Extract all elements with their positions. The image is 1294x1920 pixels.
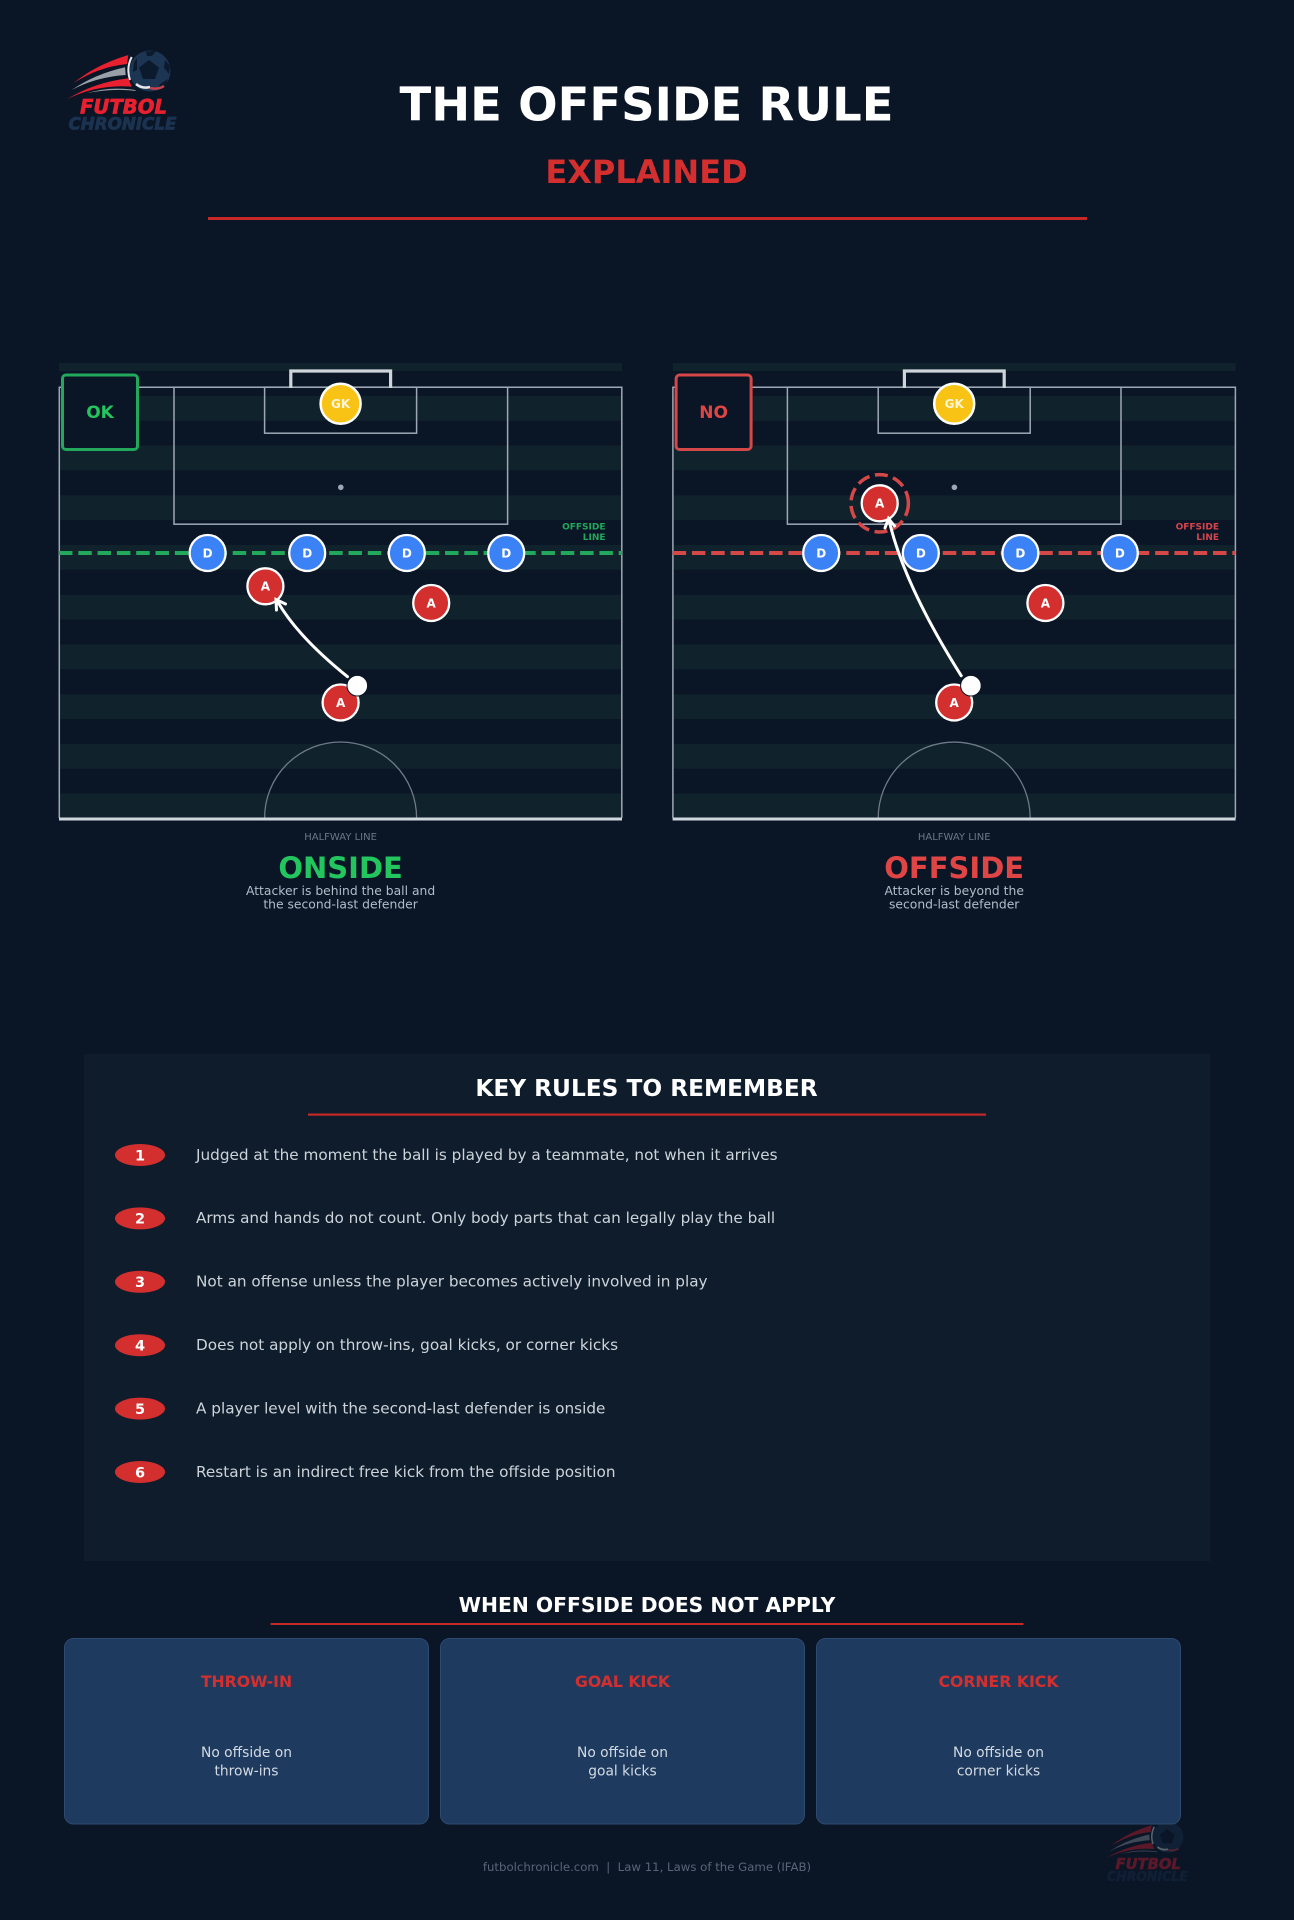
OK badge: OK <box>86 403 115 423</box>
verdict: onside: ONSIDE <box>278 851 403 885</box>
heading divider <box>308 1114 986 1116</box>
explanation: offside <box>884 884 1024 911</box>
subtitle: EXPLAINED <box>545 153 748 191</box>
offside attacker with dashed ring <box>851 475 908 532</box>
heading: key rules: KEY RULES TO REMEMBER <box>475 1075 818 1102</box>
halfway line <box>673 818 1236 820</box>
pitch markings <box>673 387 1235 818</box>
card: goal kick: No offside on <box>577 1745 668 1761</box>
rule 2: Arms and hands do not count. Only body parts that can legally play the ball <box>196 1209 775 1227</box>
rule 3: 3 <box>135 1275 145 1291</box>
penalty spot <box>952 484 957 490</box>
card: corner kick <box>816 1638 1180 1824</box>
card: corner kick: corner kicks <box>957 1764 1040 1780</box>
defenders: D <box>1115 546 1125 560</box>
panel: key rules <box>84 1054 1210 1561</box>
explanation: onside: Attacker is behind the ball and <box>246 884 435 898</box>
section divider <box>270 1623 1024 1625</box>
card: corner kick: CORNER KICK <box>939 1672 1059 1691</box>
goalkeeper <box>934 384 974 424</box>
defenders <box>190 535 524 571</box>
attackers <box>247 568 449 720</box>
defenders: D <box>916 546 926 560</box>
heading: when offside does not apply: WHEN OFFSIDE DOES NOT APPLY <box>459 1593 836 1617</box>
footer source: futbolchronicle.com | Law 11, Laws of the Game (IFAB) <box>483 1860 811 1874</box>
offside line label: LINE <box>583 533 606 543</box>
defenders: D <box>816 546 826 560</box>
rule 1: 1 <box>135 1148 145 1164</box>
panel: onside pitch <box>59 363 622 911</box>
rule 5: 5 <box>135 1402 145 1418</box>
rule 6 <box>115 1461 616 1483</box>
offside line label: OFFSIDE <box>562 522 606 532</box>
NO badge: NO <box>699 403 728 423</box>
attackers: A <box>427 596 437 610</box>
pitch stripes <box>673 363 1236 818</box>
logo: Futbol Chronicle: FUTBOL <box>80 95 167 118</box>
goalkeeper <box>321 384 361 424</box>
attackers: A <box>336 696 346 710</box>
goal <box>291 371 391 388</box>
watermark logo <box>1106 1822 1188 1885</box>
ball <box>961 675 981 696</box>
OK badge <box>62 375 138 450</box>
defenders: D <box>501 546 511 560</box>
title: THE OFFSIDE RULE <box>400 77 893 131</box>
rule 4 <box>115 1334 618 1356</box>
explanation: onside: the second-last defender <box>263 897 419 911</box>
panel: offside pitch <box>673 363 1236 911</box>
attackers <box>936 585 1063 720</box>
card: goal kick: goal kicks <box>588 1764 657 1780</box>
watermark logo: CHRONICLE <box>1107 1870 1188 1885</box>
goal <box>904 371 1004 388</box>
card: throw-in: throw-ins <box>214 1764 278 1780</box>
offside line label <box>562 522 606 543</box>
rule 4: Does not apply on throw-ins, goal kicks, or corner kicks <box>196 1336 618 1354</box>
offside attacker with dashed ring: A <box>875 497 885 511</box>
offside line <box>59 551 622 555</box>
offside line label <box>1176 522 1219 543</box>
explanation: offside: second-last defender <box>889 897 1020 911</box>
rule 5 <box>115 1398 605 1420</box>
halfway label: HALFWAY LINE <box>918 832 991 843</box>
defenders: D <box>402 546 412 560</box>
verdict: offside: OFFSIDE <box>884 851 1024 885</box>
halfway label: HALFWAY LINE <box>304 832 377 843</box>
pass arrow <box>885 518 961 676</box>
rule 6: 6 <box>135 1465 145 1481</box>
defenders: D <box>302 546 312 560</box>
attackers: A <box>261 580 271 594</box>
rule 1: Judged at the moment the ball is played by a teammate, not when it arrives <box>195 1146 778 1164</box>
offside line label: OFFSIDE <box>1176 522 1219 532</box>
NO badge <box>676 375 751 450</box>
defenders: D <box>1015 546 1025 560</box>
penalty spot <box>338 484 344 490</box>
defenders <box>803 535 1138 571</box>
logo: Futbol Chronicle <box>67 50 177 134</box>
goalkeeper: GK <box>945 397 964 411</box>
rule 3: Not an offense unless the player becomes actively involved in play <box>196 1273 708 1291</box>
card: throw-in <box>64 1638 428 1824</box>
rule 2: 2 <box>135 1212 145 1228</box>
explanation: offside: Attacker is beyond the <box>884 884 1024 898</box>
halfway line <box>59 818 622 820</box>
offside line <box>673 551 1236 555</box>
card: goal kick: GOAL KICK <box>575 1672 671 1691</box>
pitch markings <box>59 387 622 818</box>
card: goal kick <box>440 1638 804 1824</box>
card: corner kick: No offside on <box>953 1745 1044 1761</box>
rule 4: 4 <box>135 1338 145 1354</box>
ball <box>347 675 368 696</box>
logo: Futbol Chronicle: CHRONICLE <box>68 114 177 134</box>
goalkeeper: GK <box>331 397 351 411</box>
attackers: A <box>1041 596 1051 610</box>
explanation: onside <box>246 884 435 911</box>
rule 5: A player level with the second-last defender is onside <box>196 1399 605 1417</box>
pass arrow <box>276 600 348 677</box>
card: throw-in: THROW-IN <box>201 1672 292 1691</box>
rule 6: Restart is an indirect free kick from the offside position <box>196 1463 616 1481</box>
card: throw-in: No offside on <box>201 1745 292 1761</box>
watermark logo: FUTBOL <box>1116 1856 1181 1873</box>
pitch stripes <box>59 363 622 818</box>
title divider <box>208 217 1087 220</box>
defenders: D <box>203 546 213 560</box>
attackers: A <box>950 696 960 710</box>
offside line label: LINE <box>1196 533 1219 543</box>
